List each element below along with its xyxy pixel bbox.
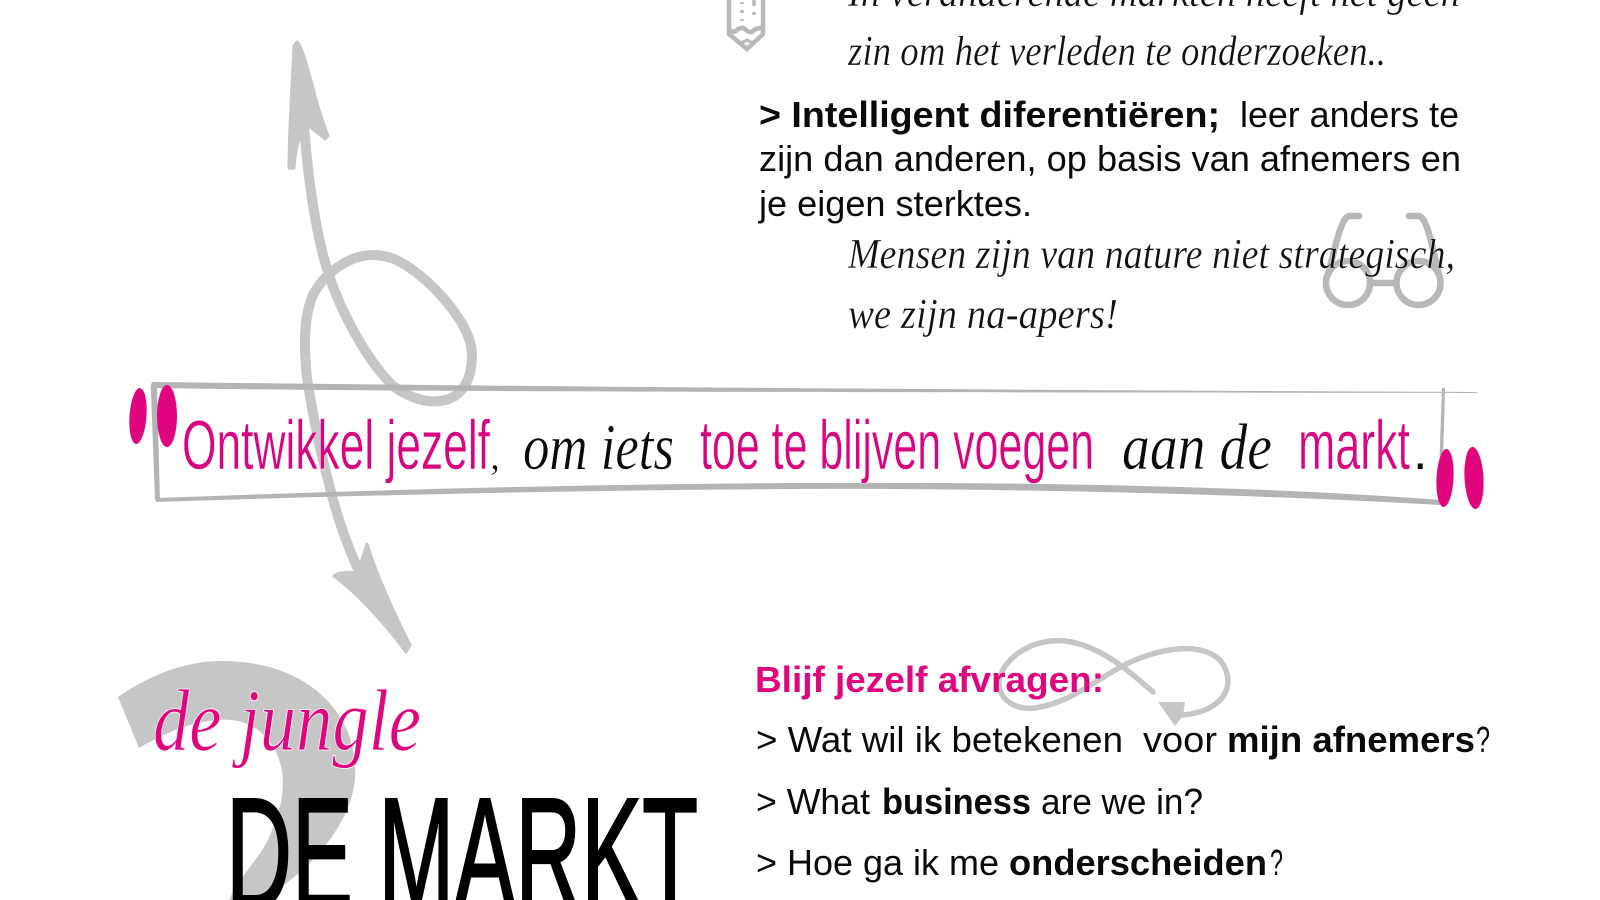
list: question 1	[756, 719, 1490, 760]
text block: intelligent differentieren: je eigen sterktes.	[758, 183, 1032, 224]
list: question 2: are we in?	[1041, 781, 1203, 822]
list: question 1: > Wat wil ik betekenen	[756, 719, 1123, 760]
subtitle: de jungle: de jungle	[153, 673, 421, 770]
text block: handwritten note on changing markets: zin om het verleden te onderzoeken..	[847, 29, 1386, 75]
text block: intelligent differentieren	[758, 94, 1461, 224]
icon: infinity arrow	[999, 641, 1228, 726]
list: question 2: > What	[756, 781, 870, 822]
icon: question mark behind title	[118, 661, 355, 900]
text block: handwritten note on strategy: Mensen zijn van nature niet strategisch,	[847, 232, 1455, 278]
callout text: aan de	[1122, 411, 1272, 484]
quote marks: closing	[1435, 447, 1485, 509]
callout text: ,	[490, 433, 500, 478]
text block: handwritten note on strategy: we zijn na-apers!	[848, 292, 1118, 338]
list: question 3: onderscheiden	[1009, 842, 1267, 883]
icon: looping double-headed arrow	[289, 42, 472, 652]
callout text: markt	[1298, 406, 1410, 484]
icon: pencil	[729, 0, 763, 49]
list: question 2	[756, 781, 1203, 822]
text block: intelligent differentieren: zijn dan anderen, op basis van afnemers en	[759, 138, 1461, 179]
list: question 1: mijn afnemers	[1227, 719, 1475, 760]
icon: glasses	[1326, 216, 1440, 305]
callout text: .	[1413, 423, 1427, 481]
callout text: Ontwikkel jezelf	[182, 406, 490, 484]
list: question 2: business	[882, 781, 1031, 822]
callout text: toe te blijven voegen	[700, 406, 1094, 484]
text block: intelligent differentieren: leer anders te	[1240, 94, 1459, 135]
list: question 1: voor	[1143, 719, 1217, 760]
list: question 1: ?	[1476, 719, 1490, 760]
text block: handwritten note on strategy	[847, 232, 1455, 338]
callout text	[182, 406, 1427, 484]
list: question 3	[756, 842, 1283, 883]
heading: blijf jezelf afvragen: Blijf jezelf afvragen:	[755, 659, 1104, 700]
text block: handwritten note on changing markets	[847, 0, 1460, 75]
list: question 3: > Hoe ga ik me	[756, 842, 999, 883]
callout text: om iets	[523, 411, 674, 484]
text block: intelligent differentieren: > Intelligent diferentiëren;	[759, 94, 1220, 135]
quote marks: opening	[128, 385, 177, 447]
callout frame	[151, 382, 1477, 505]
list: question 3: ?	[1270, 842, 1283, 883]
